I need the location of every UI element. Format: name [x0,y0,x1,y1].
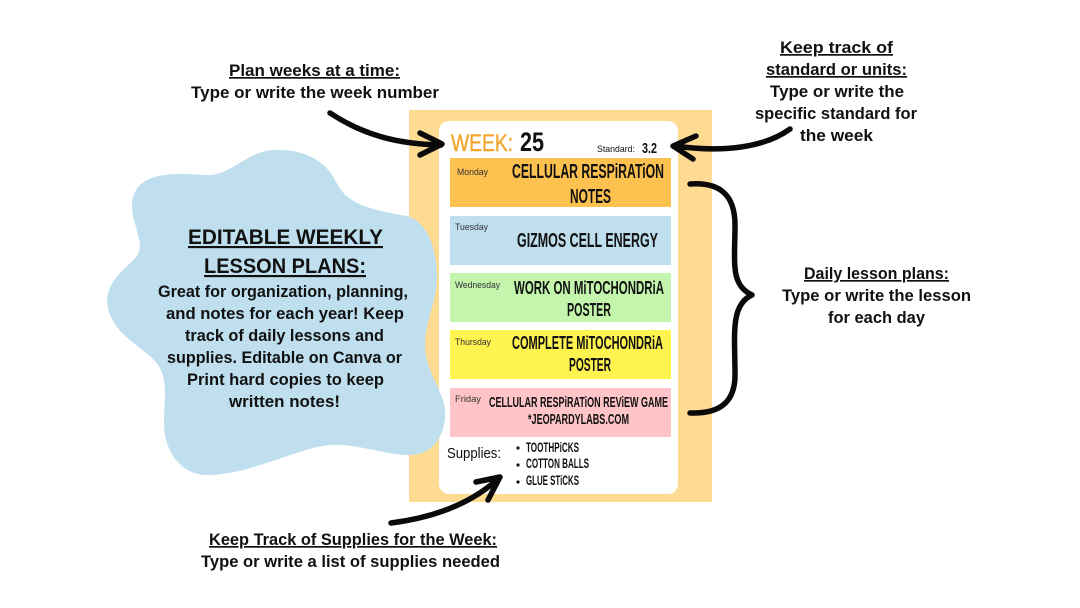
callout: plan weeks [191,61,439,102]
supplies label: Supplies: [447,445,501,462]
row: Wednesday: POSTER [567,300,611,320]
blob heading: LESSON PLANS: [204,254,366,278]
supplies list: TOOTHPiCKS [526,440,579,455]
brace: daily lessons [690,184,752,413]
row: Tuesday: GIZMOS CELL ENERGY [517,230,658,252]
row: Thursday [450,330,671,379]
row: Friday: CELLULAR RESPiRATiON REViEW GAME [489,394,668,411]
callout: supplies: Type or write a list of supplies needed [201,552,500,571]
row: Thursday: POSTER [569,355,611,375]
week header: WEEK: [451,130,513,157]
callout: standards [755,38,917,145]
arrow: to week number [330,113,442,155]
row: Tuesday [450,216,671,265]
panel: description blob [107,150,445,475]
blob body text: supplies. Editable on Canva or [167,349,403,367]
callout: supplies: Keep Track of Supplies for the Week: [209,530,497,549]
blob body text: track of daily lessons and [185,327,384,345]
white planner sheet [439,121,678,494]
row: Thursday: COMPLETE MiTOCHONDRiA [512,333,663,353]
callout: standards: the week [800,126,874,145]
arrow: to standard [673,129,790,159]
row: Monday: NOTES [570,186,611,208]
panel: lesson plan poster [409,110,712,502]
callout: standards: Keep track of [780,38,893,57]
callout: standards: standard or units: [766,60,907,79]
row: Wednesday: WORK ON MiTOCHONDRiA [514,278,664,298]
callout: plan weeks: Type or write the week number [191,83,439,102]
row: Tuesday: Tuesday [455,222,488,233]
callout: plan weeks: Plan weeks at a time: [229,61,400,80]
blob body text: written notes! [228,393,340,411]
poster background [409,110,712,502]
supplies list: COTTON BALLS [526,456,589,471]
standard label: 3.2 [642,140,657,157]
callout: standards: specific standard for [755,104,917,123]
blob heading: EDITABLE WEEKLY [188,225,383,249]
row: Thursday: Thursday [455,337,491,348]
callout: daily lesson plans: for each day [828,308,926,327]
standard label: Standard: [597,144,635,155]
blob shape [107,150,445,475]
arrow: to supplies [391,477,500,523]
row: Friday: *JEOPARDYLABS.COM [528,411,629,428]
callout: daily lesson plans: Daily lesson plans: [804,264,949,283]
row: Monday: CELLULAR RESPiRATiON [512,161,664,183]
callout: supplies [201,530,500,571]
supplies list [516,440,589,488]
row: Friday [450,388,671,437]
blob body text: Print hard copies to keep [187,371,384,389]
callout: daily lesson plans: Type or write the lesson [782,286,971,305]
row: Wednesday: Wednesday [455,280,500,291]
callout: standards: Type or write the [770,82,904,101]
week header: 25 [520,127,544,157]
supplies list: GLUE STiCKS [526,473,579,488]
blob body text [158,283,408,411]
row: Monday: Monday [457,167,488,178]
blob body text: and notes for each year! Keep [166,305,404,323]
blob heading [188,225,383,278]
blob body text: Great for organization, planning, [158,283,408,301]
row: Monday [450,158,671,208]
row: Wednesday [450,273,671,322]
callout: daily lesson plans [782,264,971,327]
row: Friday: Friday [455,394,481,405]
standard label [597,140,657,157]
